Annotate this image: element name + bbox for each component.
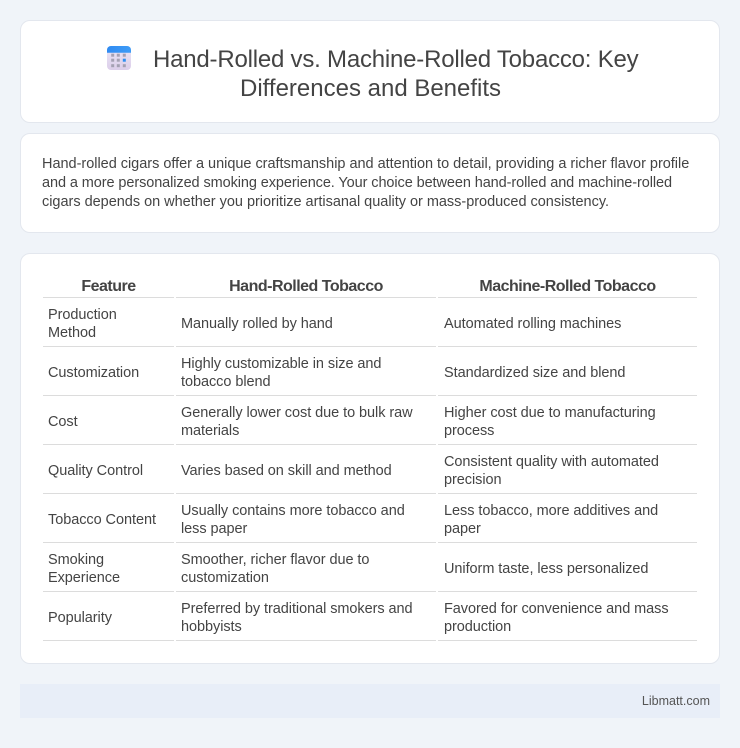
row: production method — [48, 307, 117, 341]
intro text: Hand-rolled cigars offer a unique craftsmanship and attention to detail, providing a richer flavor profile — [42, 156, 689, 172]
cell — [444, 601, 669, 635]
title — [153, 46, 638, 102]
row: tobacco content: Tobacco Content — [48, 512, 156, 528]
cell: process — [444, 423, 494, 439]
row: quality control: Quality Control — [48, 463, 143, 479]
panel: introduction — [20, 133, 720, 233]
cell — [181, 601, 413, 635]
row: production method: Production — [48, 307, 117, 323]
cell: Varies based on skill and method — [181, 463, 392, 479]
cell: Usually contains more tobacco and — [181, 503, 405, 519]
cell: Higher cost due to manufacturing — [444, 405, 656, 421]
row: smoking experience: Smoking — [48, 552, 104, 568]
cell: less paper — [181, 521, 247, 537]
header: Machine-Rolled Tobacco: Machine-Rolled Tobacco — [479, 278, 656, 295]
cell — [181, 503, 405, 537]
header: Hand-Rolled Tobacco: Hand-Rolled Tobacco — [229, 278, 383, 295]
cell: Highly customizable in size and — [181, 356, 381, 372]
row: production method: Method — [48, 325, 96, 341]
row: popularity: Popularity — [48, 610, 112, 626]
panel: comparison table — [20, 253, 720, 664]
cell — [181, 405, 413, 439]
cell: Preferred by traditional smokers and — [181, 601, 413, 617]
cell: Favored for convenience and mass — [444, 601, 669, 617]
title: Hand-Rolled vs. Machine-Rolled Tobacco: Key — [153, 46, 638, 73]
table: comparison — [81, 278, 656, 295]
row: customization: Customization — [48, 365, 139, 381]
cell: Consistent quality with automated — [444, 454, 659, 470]
cell: Uniform taste, less personalized — [444, 561, 648, 577]
cell: materials — [181, 423, 239, 439]
footer bar — [20, 684, 720, 718]
row: smoking experience: Experience — [48, 570, 120, 586]
intro text — [42, 156, 689, 210]
header: Feature: Feature — [81, 278, 136, 295]
cell: hobbyists — [181, 619, 242, 635]
cell: Less tobacco, more additives and — [444, 503, 658, 519]
cell: Standardized size and blend — [444, 365, 625, 381]
icon: calendar — [107, 46, 131, 70]
intro text: and a more personalized smoking experience. Your choice between hand-rolled and machine-rolled — [42, 175, 672, 191]
cell: tobacco blend — [181, 374, 271, 390]
cell: customization — [181, 570, 269, 586]
cell: paper — [444, 521, 481, 537]
cell: precision — [444, 472, 502, 488]
cell — [444, 503, 658, 537]
title: Differences and Benefits — [240, 75, 501, 102]
cell — [181, 552, 369, 586]
cell: Automated rolling machines — [444, 316, 621, 332]
row: smoking experience — [48, 552, 120, 586]
row: cost: Cost — [48, 414, 78, 430]
cell: Smoother, richer flavor due to — [181, 552, 369, 568]
cell: Generally lower cost due to bulk raw — [181, 405, 413, 421]
footer text: Libmatt.com — [642, 694, 710, 708]
cell — [444, 454, 659, 488]
cell: Manually rolled by hand — [181, 316, 333, 332]
intro text: cigars depends on whether you prioritize artisanal quality or mass-produced consistency. — [42, 194, 609, 210]
cell — [444, 405, 656, 439]
cell: production — [444, 619, 511, 635]
panel: header — [20, 20, 720, 123]
cell — [181, 356, 381, 390]
